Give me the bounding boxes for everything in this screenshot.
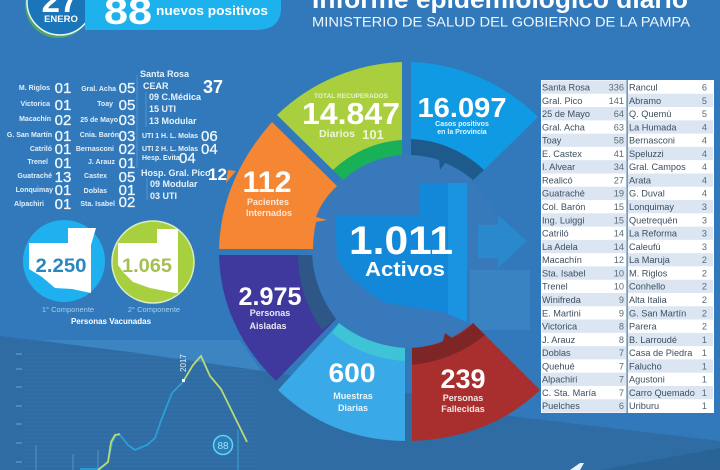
table of cases by locality: 1 <box>702 388 707 398</box>
table of cases by locality: Alta Italia <box>629 295 668 305</box>
table of cases by locality: 4 <box>702 136 707 146</box>
wheel segment: isolated people: Personas <box>250 308 290 318</box>
hospital and locality list: Catriló <box>30 146 52 153</box>
wheel segment: deceased people: Fallecidas <box>441 404 485 414</box>
table of cases by locality: Macachín <box>542 255 582 265</box>
table of cases by locality: 5 <box>702 96 707 106</box>
hospital and locality list: 05 <box>119 80 135 97</box>
table of cases by locality: Gral. Pico <box>542 96 582 106</box>
table of cases by locality: 336 <box>609 82 624 92</box>
table of cases by locality: E. Castex <box>542 149 582 159</box>
table of cases by locality: 15 <box>614 215 624 225</box>
table of cases by locality: 141 <box>609 96 624 106</box>
hospital and locality list: Hesp. Evita <box>142 155 180 162</box>
table of cases by locality: 4 <box>702 162 707 172</box>
hospital and locality list: 05 <box>119 169 135 186</box>
new positives pill: nuevos positivos <box>156 3 268 18</box>
hospital and locality list: 01 <box>55 80 71 97</box>
table of cases by locality: 9 <box>619 295 624 305</box>
table of cases by locality: Guatraché <box>542 189 585 199</box>
table of cases by locality: 58 <box>614 136 624 146</box>
table of cases by locality: 7 <box>619 361 624 371</box>
table of cases by locality: 34 <box>614 162 624 172</box>
table of cases by locality: 7 <box>619 388 624 398</box>
table of cases by locality: La Humada <box>629 122 677 132</box>
table of cases by locality: 63 <box>614 122 624 132</box>
table of cases by locality: Agustoni <box>629 375 665 385</box>
table of cases by locality: Abramo <box>629 96 661 106</box>
table of cases by locality: 4 <box>702 149 707 159</box>
hospital and locality list: Sta. Isabel <box>80 201 115 208</box>
table of cases by locality: C. Sta. María <box>542 388 597 398</box>
central province with active cases <box>335 183 467 322</box>
hospital and locality list: 03 <box>119 128 135 145</box>
table of cases by locality: Gral. Campos <box>629 162 686 172</box>
hospital and locality list: 01 <box>55 128 71 145</box>
wheel segment: provincial positive cases <box>411 62 538 180</box>
wheel segment: recovered: 14.847 <box>302 96 400 131</box>
table of cases by locality: 27 <box>614 176 624 186</box>
table of cases by locality: 2 <box>702 282 707 292</box>
table of cases by locality: G. Duval <box>629 189 665 199</box>
table of cases by locality: 5 <box>702 109 707 119</box>
wheel segment: isolated people: 2.975 <box>238 283 302 311</box>
hospital and locality list: Alpachiri <box>14 201 44 208</box>
table of cases by locality: Casa de Piedra <box>629 348 693 358</box>
central hub <box>308 154 502 348</box>
wheel segment: provincial positive cases: 16.097 <box>418 92 506 123</box>
hospital and locality list: 02 <box>119 194 135 211</box>
table of cases by locality: 15 <box>614 202 624 212</box>
footer logo fragment <box>570 463 584 470</box>
table of cases by locality: Santa Rosa <box>542 82 591 92</box>
wheel segment: recovered: Diarios <box>319 129 355 140</box>
wheel segment: provincial positive cases: en la Provincia <box>437 129 487 136</box>
table of cases by locality: Trenel <box>542 282 568 292</box>
table of cases by locality: 4 <box>702 189 707 199</box>
hospital and locality list: 01 <box>55 141 71 158</box>
hospital and locality list: G. San Martín <box>7 132 52 139</box>
table of cases by locality: 3 <box>702 215 707 225</box>
new positives pill <box>85 0 281 32</box>
table of cases by locality: La Maruja <box>629 255 671 265</box>
hospital and locality list: 01 <box>55 182 71 199</box>
table of cases by locality: Doblas <box>542 348 571 358</box>
table of cases by locality: 3 <box>702 242 707 252</box>
hospital and locality list: Hosp. Gral. Pico <box>141 168 211 178</box>
table of cases by locality: Conhello <box>629 282 665 292</box>
table of cases by locality: La Adela <box>542 242 579 252</box>
table of cases by locality: Parera <box>629 322 657 332</box>
hospital and locality list: 13 <box>55 169 71 186</box>
table of cases by locality: Q. Quemú <box>629 109 671 119</box>
table of cases by locality: 6 <box>619 401 624 411</box>
table of cases by locality: 8 <box>619 335 624 345</box>
hospital and locality list: 37 <box>203 77 223 97</box>
wheel segment: deceased people: 239 <box>440 364 486 394</box>
hospital and locality list: 12 <box>208 165 227 184</box>
table of cases by locality: 8 <box>619 322 624 332</box>
table of cases by locality: E. Martini <box>542 308 581 318</box>
table of cases by locality: 14 <box>614 229 624 239</box>
hospital and locality list: Santa Rosa <box>140 69 190 79</box>
hospital and locality list: 01 <box>55 196 71 213</box>
title <box>312 0 691 30</box>
table of cases by locality: Quehué <box>542 361 575 371</box>
hospital and locality list: Cnia. Barón <box>80 132 119 139</box>
hospital and locality list: Lonquimay <box>16 187 53 194</box>
hospital and locality list: 25 de Mayo <box>80 117 118 124</box>
table of cases by locality: 3 <box>702 229 707 239</box>
table of cases by locality: 7 <box>619 375 624 385</box>
hospital and locality list: 13 Modular <box>149 116 197 126</box>
hospital and locality list: 02 <box>55 112 71 129</box>
table of cases by locality: Col. Barón <box>542 202 585 212</box>
wheel segment: provincial positive cases: Casos positivos <box>435 121 489 128</box>
line chart of daily cases: 2017 <box>179 354 188 372</box>
wheel segment: hospitalised patients: Internados <box>246 208 292 218</box>
table of cases by locality: 19 <box>614 189 624 199</box>
hospital and locality list: 09 Modular <box>150 179 198 189</box>
table of cases by locality: J. Arauz <box>542 335 576 345</box>
table of cases by locality: 3 <box>702 202 707 212</box>
second component circle: 1.065 <box>122 256 172 277</box>
table of cases by locality: Sta. Isabel <box>542 268 585 278</box>
table of cases by locality: 7 <box>619 348 624 358</box>
hospital and locality list: UTI 1 H. L. Molas <box>142 133 198 140</box>
table of cases by locality: 10 <box>614 268 624 278</box>
header date badge <box>25 0 93 38</box>
vaccinated people: 1° Componente <box>42 305 94 314</box>
table of cases by locality: 2 <box>702 268 707 278</box>
wheel segment: daily samples: Muestras <box>333 391 373 401</box>
wheel segment: daily samples: 600 <box>328 358 376 388</box>
central province with active cases: Activos <box>365 259 445 281</box>
table of cases by locality: Puelches <box>542 401 580 411</box>
hospital and locality list: 01 <box>119 155 135 172</box>
table of cases by locality: Bernasconi <box>629 136 675 146</box>
hospital and locality list: M. Riglos <box>19 85 50 92</box>
hospital and locality list: J. Arauz <box>88 159 115 166</box>
table of cases by locality: 9 <box>619 308 624 318</box>
wheel segment: hospitalised patients: 112 <box>242 166 292 199</box>
table of cases by locality: Catriló <box>542 229 569 239</box>
table of cases by locality: Realicó <box>542 176 573 186</box>
hospital and locality list: Bernasconi <box>76 146 114 153</box>
line chart of daily cases <box>16 354 255 470</box>
table of cases by locality: 6 <box>702 82 707 92</box>
hospital and locality list <box>7 69 227 213</box>
table of cases by locality: Alpachiri <box>542 375 577 385</box>
table of cases by locality: 41 <box>614 149 624 159</box>
today marker 88 <box>214 436 232 454</box>
table of cases by locality: 64 <box>614 109 624 119</box>
vaccinated people: Personas Vacunadas <box>71 317 152 326</box>
wheel segment: recovered: 101 <box>362 127 384 142</box>
table of cases by locality: Victorica <box>542 322 578 332</box>
arrow: background pointer <box>478 215 527 268</box>
table of cases by locality: 10 <box>614 282 624 292</box>
table of cases by locality: I. Alvear <box>542 162 575 172</box>
table of cases by locality: 2 <box>702 308 707 318</box>
table of cases by locality: M. Riglos <box>629 268 668 278</box>
wheel segment: isolated people: Aisladas <box>249 321 287 331</box>
hospital and locality list: CEAR <box>143 81 169 91</box>
hospital and locality list: Gral. Acha <box>81 86 116 93</box>
hospital and locality list: 03 UTI <box>150 191 177 201</box>
table of cases by locality: Speluzzi <box>629 149 664 159</box>
hospital and locality list: Guatraché <box>17 173 52 180</box>
table of cases by locality: 25 de Mayo <box>542 109 590 119</box>
table of cases by locality: 1 <box>702 375 707 385</box>
table of cases by locality: Rancul <box>629 82 658 92</box>
table of cases by locality: 2 <box>702 295 707 305</box>
vaccinated people <box>23 220 194 326</box>
header date badge: ENERO <box>44 14 78 25</box>
hospital and locality list: Trenel <box>27 159 48 166</box>
first component circle: 2.250 <box>36 256 86 277</box>
hospital and locality list: Doblas <box>84 188 107 195</box>
hospital and locality list: 04 <box>179 150 196 167</box>
table of cases by locality: Lonquimay <box>629 202 674 212</box>
table of cases by locality: B. Larroudé <box>629 335 677 345</box>
table of cases by locality: 4 <box>702 176 707 186</box>
wheel segment: hospitalised patients <box>219 122 337 249</box>
table of cases by locality: 1 <box>702 401 707 411</box>
wheel segment: daily samples: Diarias <box>338 403 368 413</box>
table of cases by locality: Toay <box>542 136 562 146</box>
wheel segment: deceased people <box>412 323 540 441</box>
wheel segment: deceased people: Personas <box>443 393 483 403</box>
table of cases by locality: 2 <box>702 255 707 265</box>
title: MINISTERIO DE SALUD DEL GOBIERNO DE LA PAMPA <box>312 14 691 30</box>
table of cases by locality: Caleufú <box>629 242 661 252</box>
table of cases by locality: Winifreda <box>542 295 582 305</box>
hospital and locality list: Victorica <box>21 101 50 108</box>
table of cases by locality: G. San Martín <box>629 308 686 318</box>
hospital and locality list: 05 <box>119 97 135 114</box>
hospital and locality list: 03 <box>119 112 135 129</box>
table of cases by locality: Gral. Acha <box>542 122 586 132</box>
hospital and locality list: Castex <box>84 173 107 180</box>
first component circle <box>23 220 105 302</box>
hospital and locality list: 01 <box>119 182 135 199</box>
hospital and locality list: 15 UTI <box>149 104 176 114</box>
vaccinated people: 2° Componente <box>128 305 180 314</box>
table of cases by locality: Quetrequén <box>629 215 678 225</box>
second component circle <box>112 221 194 303</box>
table of cases by locality: Carro Quemado <box>629 388 695 398</box>
hospital and locality list: Toay <box>97 101 113 108</box>
table of cases by locality <box>541 80 714 413</box>
hospital and locality list: 09 C.Médica <box>149 92 202 102</box>
table of cases by locality: 1 <box>702 348 707 358</box>
table of cases by locality: 12 <box>614 255 624 265</box>
wheel segment: recovered <box>277 62 402 180</box>
hospital and locality list: Macachín <box>19 116 51 123</box>
wheel segment: recovered: TOTAL RECUPERADOS <box>314 93 389 100</box>
central province with active cases: 1.011 <box>349 219 453 263</box>
table of cases by locality: Uriburu <box>629 401 659 411</box>
hospital and locality list: UTI 2 H. L. Molas <box>142 146 198 153</box>
wheel segment: daily samples <box>278 323 405 441</box>
table of cases by locality: Falucho <box>629 361 662 371</box>
table of cases by locality: 1 <box>702 335 707 345</box>
hospital and locality list: 01 <box>55 155 71 172</box>
table of cases by locality: 4 <box>702 122 707 132</box>
table of cases by locality: 2 <box>702 322 707 332</box>
table of cases by locality: Arata <box>629 176 652 186</box>
hospital and locality list: 06 <box>201 128 218 145</box>
wheel segment: isolated people <box>219 255 336 381</box>
today marker 88: 88 <box>217 441 229 452</box>
wheel segment: hospitalised patients: Pacientes <box>247 197 289 207</box>
table of cases by locality: Ing. Luiggi <box>542 215 584 225</box>
hospital and locality list: 02 <box>119 141 135 158</box>
table of cases by locality: 1 <box>702 361 707 371</box>
hospital and locality list: 04 <box>201 141 218 158</box>
table of cases by locality: 14 <box>614 242 624 252</box>
hospital and locality list: 01 <box>55 97 71 114</box>
table of cases by locality: La Reforma <box>629 229 678 239</box>
